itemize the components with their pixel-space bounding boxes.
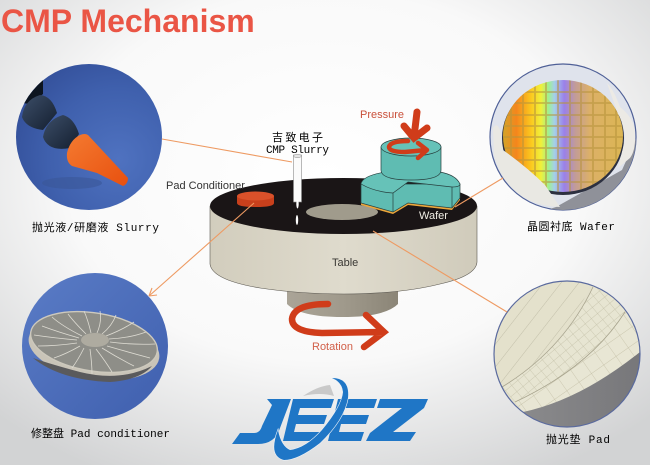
carrier base xyxy=(361,172,460,212)
title: CMP Mechanism xyxy=(1,3,255,39)
pressure rotation arrow xyxy=(389,141,427,158)
photo: polishing pad xyxy=(490,280,645,432)
caption: pad conditioner: 修整盘 Pad conditioner xyxy=(31,426,170,441)
diagram: polishing machine xyxy=(166,109,477,353)
stem under table xyxy=(287,285,398,317)
pad conditioner label: Pad Conditioner xyxy=(166,180,245,192)
Z xyxy=(366,399,428,441)
photo: wafer xyxy=(490,64,640,212)
connector lines xyxy=(149,139,507,312)
table label: Table xyxy=(332,257,358,269)
wafer layer xyxy=(361,197,460,214)
slurry tube xyxy=(294,154,302,225)
photo: pad conditioner disk xyxy=(22,273,168,419)
caption: pad: 抛光垫 Pad xyxy=(546,432,610,447)
rotation label: Rotation xyxy=(312,341,353,353)
slurry tube label: CMP Slurry xyxy=(266,145,329,157)
J xyxy=(232,399,291,444)
pressure label: Pressure xyxy=(360,109,404,121)
logo: JEEZ xyxy=(232,378,428,460)
E xyxy=(283,399,334,441)
table body xyxy=(210,206,477,294)
table rotation arrow xyxy=(292,304,384,347)
photo: slurry nozzle xyxy=(16,64,162,210)
slurry tube label: 吉致电子 xyxy=(272,130,323,145)
slurry tube label xyxy=(266,130,329,157)
wafer label: Wafer xyxy=(419,210,448,222)
E xyxy=(328,399,377,441)
caption: slurry: 抛光液/研磨液 Slurry xyxy=(32,220,159,235)
centre hole xyxy=(306,204,378,220)
caption: wafer: 晶圆衬底 Wafer xyxy=(527,219,615,234)
carrier top cylinder xyxy=(381,138,441,180)
pressure arrow xyxy=(404,112,427,138)
pad surface xyxy=(210,178,477,234)
conditioner puck xyxy=(237,192,274,207)
ellipse swoosh xyxy=(274,378,348,460)
